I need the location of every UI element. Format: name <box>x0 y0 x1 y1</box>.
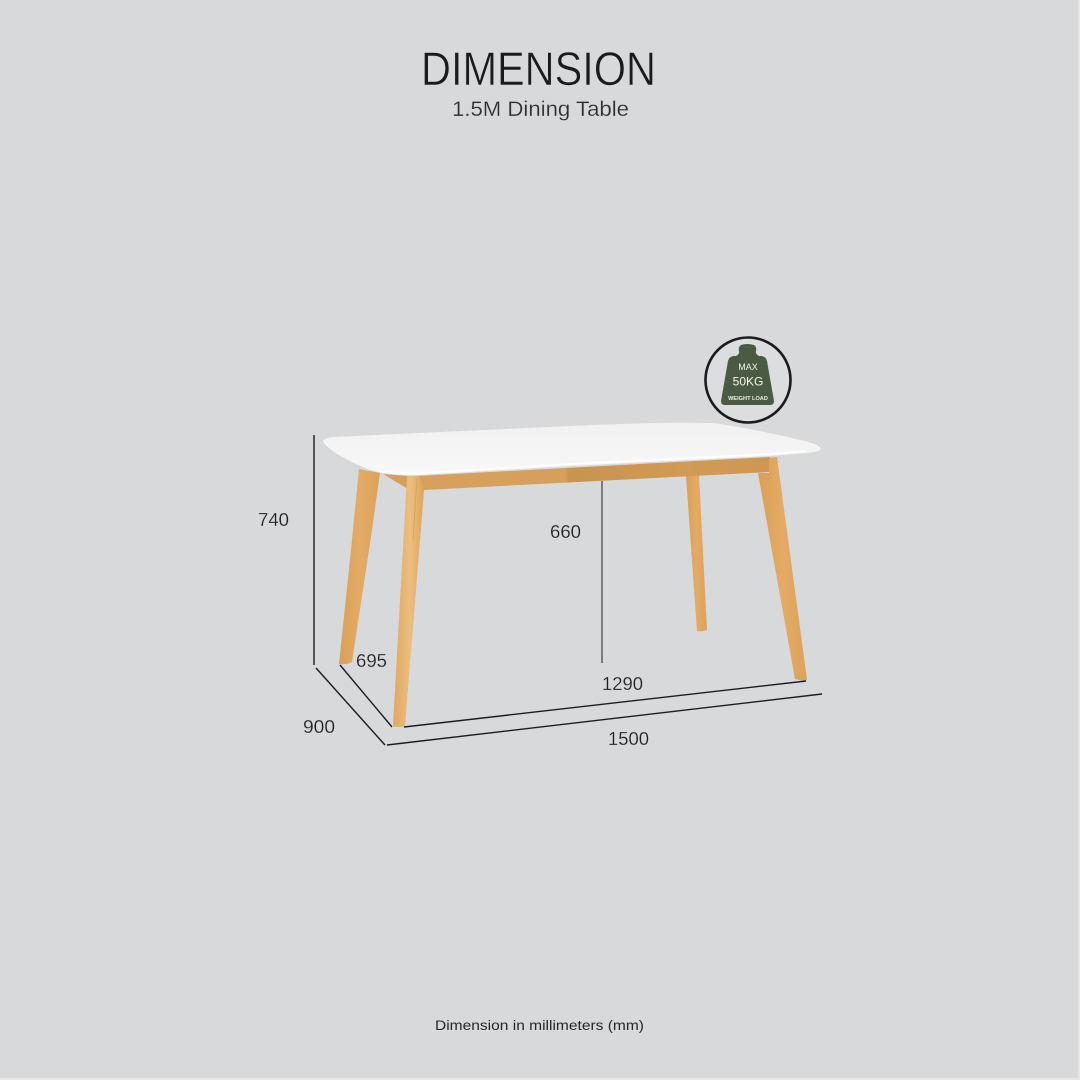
dimension line: 1290 inner width <box>404 681 806 727</box>
footer note: Dimension in millimeters (mm) <box>435 1018 644 1033</box>
dimension line: 1500 width <box>387 694 822 745</box>
subtitle: 1.5M Dining Table <box>452 98 629 121</box>
title: DIMENSION <box>421 42 656 95</box>
table top <box>323 423 821 475</box>
icon: weight <box>721 344 774 405</box>
back right inner leg <box>686 475 707 631</box>
badge text: WEIGHT LOAD: WEIGHT LOAD <box>728 396 768 402</box>
apron left stub <box>383 474 408 489</box>
apron <box>417 457 770 490</box>
back left leg <box>339 469 380 664</box>
label: 1290: 1290 <box>602 673 643 694</box>
right leg <box>758 457 807 680</box>
dimension line: 740 height <box>313 435 315 665</box>
label: 1500: 1500 <box>608 728 649 749</box>
front leg seam <box>413 478 417 540</box>
badge ring <box>706 338 790 422</box>
label: 900: 900 <box>303 716 335 737</box>
dimension line: 900 depth <box>316 668 385 745</box>
label: 740: 740 <box>258 509 289 530</box>
table top edge highlight <box>378 451 806 473</box>
badge text: 50KG: 50KG <box>733 374 763 388</box>
dining table illustration <box>323 423 821 727</box>
badge: max weight load <box>706 338 790 422</box>
dimension line: 695 inner depth <box>340 665 392 727</box>
badge text: MAX: MAX <box>738 362 758 372</box>
label: 660: 660 <box>550 521 581 542</box>
label: 695: 695 <box>356 650 387 671</box>
front left leg <box>393 476 424 727</box>
dimension line: 660 clearance <box>601 481 603 663</box>
